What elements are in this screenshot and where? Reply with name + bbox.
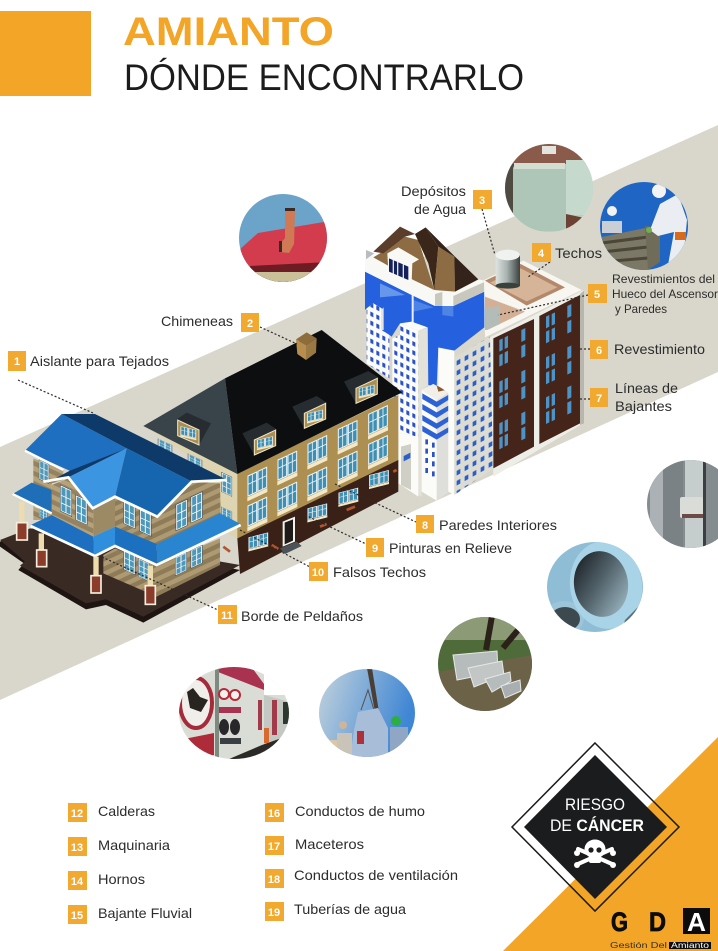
side wall <box>148 428 240 540</box>
background band <box>0 125 718 700</box>
label 5: y Paredes <box>615 302 667 316</box>
label 11: Borde de Peldaños <box>241 608 363 624</box>
leader lines <box>18 209 590 610</box>
black roof <box>225 330 402 474</box>
list item 18: 18 <box>268 874 280 886</box>
title: AMIANTO <box>123 10 334 54</box>
label 7: Líneas de <box>615 380 678 396</box>
front cladding <box>490 290 584 477</box>
front roof <box>43 448 227 517</box>
label 3: 3 <box>479 195 485 207</box>
list item 19: 19 <box>268 907 280 919</box>
cancer risk diamond <box>512 743 679 911</box>
list item 13 <box>68 837 170 856</box>
photo: blue pipes <box>547 542 643 632</box>
grey roof slope <box>143 378 237 474</box>
list item 17: Maceteros <box>295 836 364 852</box>
front tan wall <box>237 395 398 538</box>
GDA logo: Amianto <box>671 941 710 950</box>
list item 19 <box>265 901 406 921</box>
list item 17: 17 <box>268 841 280 853</box>
title <box>123 10 524 98</box>
label 7 <box>590 380 678 414</box>
GDA logo: G <box>611 907 628 937</box>
GDA logo: A <box>687 907 706 937</box>
white strip <box>438 348 454 495</box>
photo: worker on roof <box>600 182 688 270</box>
icon: skull and crossbones <box>574 840 616 868</box>
list item 18: Conductos de ventilación <box>294 867 458 883</box>
label 3 <box>401 183 492 217</box>
tower building <box>365 227 493 501</box>
label 2: 2 <box>247 318 253 330</box>
list item 16: 16 <box>268 808 280 820</box>
list item 12: 12 <box>71 808 83 820</box>
list item 14 <box>68 871 145 890</box>
label 11: 11 <box>221 610 233 622</box>
label 5 <box>588 272 718 316</box>
label 10: 10 <box>312 567 324 579</box>
label 3: Depósitos <box>401 183 466 199</box>
GDA logo <box>610 907 711 950</box>
photo: water tanks <box>505 144 594 232</box>
dormers <box>177 371 378 455</box>
flat roof <box>484 261 582 337</box>
left porch roof <box>13 483 52 513</box>
label 9 <box>366 538 512 557</box>
columns <box>17 502 155 604</box>
list item 12: Calderas <box>98 803 155 819</box>
list item 14: 14 <box>71 876 84 888</box>
list item 15 <box>68 905 192 924</box>
label 8: Paredes Interiores <box>439 517 557 533</box>
dormer <box>387 247 419 282</box>
label 9: Pinturas en Relieve <box>389 540 512 556</box>
label 2 <box>161 313 259 332</box>
list item 16: Conductos de humo <box>295 803 425 819</box>
water tank <box>495 250 520 289</box>
list item 13: 13 <box>71 842 83 854</box>
grey wall with windows <box>454 337 493 495</box>
brick lower wall <box>237 460 398 574</box>
striped tower <box>422 384 448 501</box>
list item 15: Bajante Fluvial <box>98 905 192 921</box>
blue house <box>0 414 241 623</box>
label 4: 4 <box>538 248 545 260</box>
log walls <box>33 458 221 597</box>
list item 17 <box>265 836 364 855</box>
label 2: Chimeneas <box>161 313 233 329</box>
windows <box>247 406 389 551</box>
label 6: 6 <box>596 345 602 357</box>
ground base <box>0 528 240 623</box>
photo: planters <box>437 616 533 712</box>
list item 16 <box>265 803 425 822</box>
house windows <box>39 459 203 582</box>
list item 18 <box>265 867 458 888</box>
front building <box>484 250 584 477</box>
label 6: Revestimiento <box>614 341 705 357</box>
cancer risk diamond: DE CÁNCER <box>550 816 644 835</box>
label 10: Falsos Techos <box>333 564 426 580</box>
photo: big bag <box>319 668 415 760</box>
label 8: 8 <box>422 520 428 532</box>
label 5: Hueco del Ascensor <box>612 287 718 301</box>
list item 13: Maquinaria <box>98 837 170 853</box>
header orange block <box>0 11 91 96</box>
cancer risk diamond: RIESGO <box>565 795 625 814</box>
label 7: Bajantes <box>615 398 672 414</box>
brown pitched roof <box>373 227 478 292</box>
blue facade <box>365 272 484 387</box>
title: DÓNDE ENCONTRARLO <box>124 57 524 98</box>
list item 14: Hornos <box>98 871 145 887</box>
list item 12 <box>68 803 155 822</box>
list item 15: 15 <box>71 910 83 922</box>
corner orange triangle <box>503 737 718 951</box>
facade trim <box>365 250 484 306</box>
label 4: Techos <box>555 245 602 261</box>
list item 19: Tuberías de agua <box>294 901 406 917</box>
GDA logo: Gestión Del <box>610 940 667 950</box>
label 4 <box>532 243 602 262</box>
porch roof <box>31 513 241 565</box>
label 3: de Agua <box>414 201 466 217</box>
back roof <box>25 414 227 482</box>
tan apartment building <box>143 330 402 574</box>
photo: warning signs truck <box>178 665 290 762</box>
label 1 <box>8 351 169 371</box>
photo: pipe on wall <box>646 460 718 550</box>
chimney <box>296 332 317 360</box>
label 5: 5 <box>594 289 600 301</box>
photo: chimney <box>239 194 330 282</box>
white window towers <box>367 303 428 497</box>
brick marks <box>223 470 397 552</box>
side wall windows <box>158 438 232 520</box>
label 6 <box>590 340 705 359</box>
label 7: 7 <box>596 393 602 405</box>
label 11 <box>218 605 363 624</box>
label 10 <box>309 562 426 581</box>
GDA logo: D <box>649 907 666 937</box>
door <box>280 517 302 554</box>
label 5: Revestimientos del <box>612 272 715 286</box>
label 9: 9 <box>372 543 378 555</box>
label 1: Aislante para Tejados <box>30 353 169 369</box>
label 1: 1 <box>14 356 20 368</box>
